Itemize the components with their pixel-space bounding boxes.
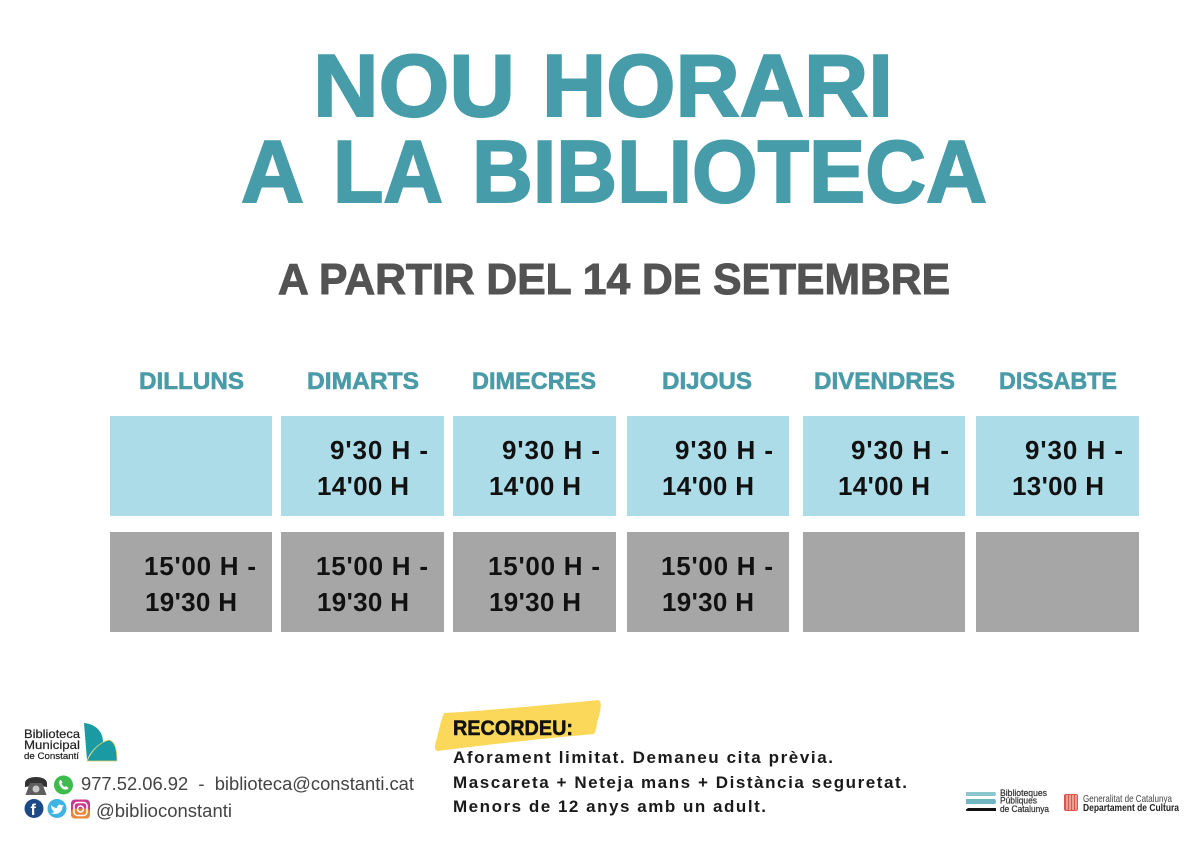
cell: Tuesday afternoon: 15'00 H -: [316, 551, 428, 581]
cell: Thursday afternoon: 15'00 H -: [661, 551, 773, 581]
logo text: Biblioteques: [1000, 788, 1047, 799]
title: [241, 36, 987, 221]
contact: social media: [24, 799, 232, 821]
afternoon row: [110, 532, 1139, 632]
weekday headers: [139, 368, 1117, 395]
icon: whatsapp: [54, 776, 73, 794]
title: LA: [333, 122, 443, 221]
reminder lines: Menors de 12 anys amb un adult.: [453, 797, 766, 816]
cell: Saturday morning: [976, 416, 1139, 516]
icon: facebook: [24, 799, 44, 819]
cell: Tuesday afternoon: 19'30 H: [317, 587, 409, 617]
icon: telephone: [25, 777, 47, 795]
reminder heading: RECORDEU:: [453, 716, 573, 740]
cell: Monday afternoon: 15'00 H -: [144, 551, 256, 581]
reminder block: [435, 700, 907, 816]
logo wordmark: Municipal: [24, 738, 80, 752]
logo: Biblioteques Públiques de Catalunya: [966, 788, 1050, 815]
title: BIBLIOTECA: [472, 122, 987, 221]
reminder lines: Aforament limitat. Demaneu cita prèvia.: [453, 748, 833, 767]
logo text: Públiques: [1000, 796, 1037, 806]
logo wordmark: de Constantí: [24, 751, 79, 762]
cell: Tuesday morning: 9'30 H -: [330, 435, 428, 465]
cell: Wednesday afternoon: [453, 532, 616, 632]
cell: Saturday morning: 9'30 H -: [1025, 435, 1123, 465]
cell: Wednesday morning: 14'00 H: [489, 471, 581, 501]
cell: Friday morning: 9'30 H -: [851, 435, 949, 465]
weekday headers: DILLUNS: [139, 368, 244, 395]
weekday headers: DIMECRES: [472, 368, 596, 395]
logo text: de Catalunya: [1000, 804, 1050, 815]
weekday headers: DIMARTS: [307, 368, 419, 395]
morning row: [110, 416, 1139, 516]
icon: instagram: [71, 800, 90, 818]
title: NOU: [313, 36, 515, 135]
contact: phone and email: [25, 774, 414, 795]
cell: Saturday morning: 13'00 H: [1012, 471, 1104, 501]
cell: Tuesday morning: 14'00 H: [317, 471, 409, 501]
cell: Friday morning: [803, 416, 965, 516]
cell: Tuesday morning: [281, 416, 444, 516]
weekday headers: DIJOUS: [662, 368, 752, 395]
cell: Wednesday afternoon: 19'30 H: [489, 587, 581, 617]
reminder lines: Mascareta + Neteja mans + Distància seguretat.: [453, 773, 907, 792]
cell: Saturday afternoon: [976, 532, 1139, 632]
cell: Thursday morning: 9'30 H -: [675, 435, 773, 465]
logo: Generalitat de Catalunya: Departament de Cultura: [1083, 802, 1179, 814]
logo wordmark: [24, 727, 80, 762]
weekday headers: DIVENDRES: [814, 368, 955, 395]
cell: Tuesday afternoon: [281, 532, 444, 632]
cell: Thursday morning: [627, 416, 789, 516]
cell: Wednesday afternoon: 15'00 H -: [488, 551, 600, 581]
cell: Wednesday morning: [453, 416, 616, 516]
reminder lines: [453, 748, 907, 816]
cell: Wednesday morning: 9'30 H -: [502, 435, 600, 465]
cell: Friday afternoon: [803, 532, 965, 632]
generalitat text: Generalitat de Catalunya: [1083, 793, 1172, 805]
cell: Monday afternoon: 19'30 H: [145, 587, 237, 617]
subtitle: A PARTIR DEL 14 DE SETEMBRE: [278, 255, 950, 304]
cell: Thursday afternoon: [627, 532, 789, 632]
yellow brush highlight: [435, 700, 601, 751]
title: HORARI: [542, 36, 893, 135]
cell: Monday afternoon: [110, 532, 272, 632]
title: A: [241, 122, 304, 221]
social handle: @biblioconstanti: [96, 801, 232, 821]
cell: Friday morning: 14'00 H: [838, 471, 930, 501]
icon: facebook: f: [30, 802, 36, 819]
cell: Thursday morning: 14'00 H: [662, 471, 754, 501]
logo text: [1000, 788, 1050, 815]
contact text: 977.52.06.92 - biblioteca@constanti.cat: [81, 774, 414, 794]
logo stripes: [966, 792, 996, 811]
logo mark: [84, 723, 117, 761]
cell: Thursday afternoon: 19'30 H: [662, 587, 754, 617]
icon: senyera shield: [1064, 794, 1078, 811]
weekday headers: DISSABTE: [999, 368, 1117, 395]
logo: Generalitat de Catalunya: [1064, 793, 1179, 814]
logo wordmark: Biblioteca: [24, 727, 80, 741]
cell: Monday morning: [110, 416, 272, 516]
library logo: [24, 723, 117, 762]
icon: twitter: [48, 799, 66, 818]
